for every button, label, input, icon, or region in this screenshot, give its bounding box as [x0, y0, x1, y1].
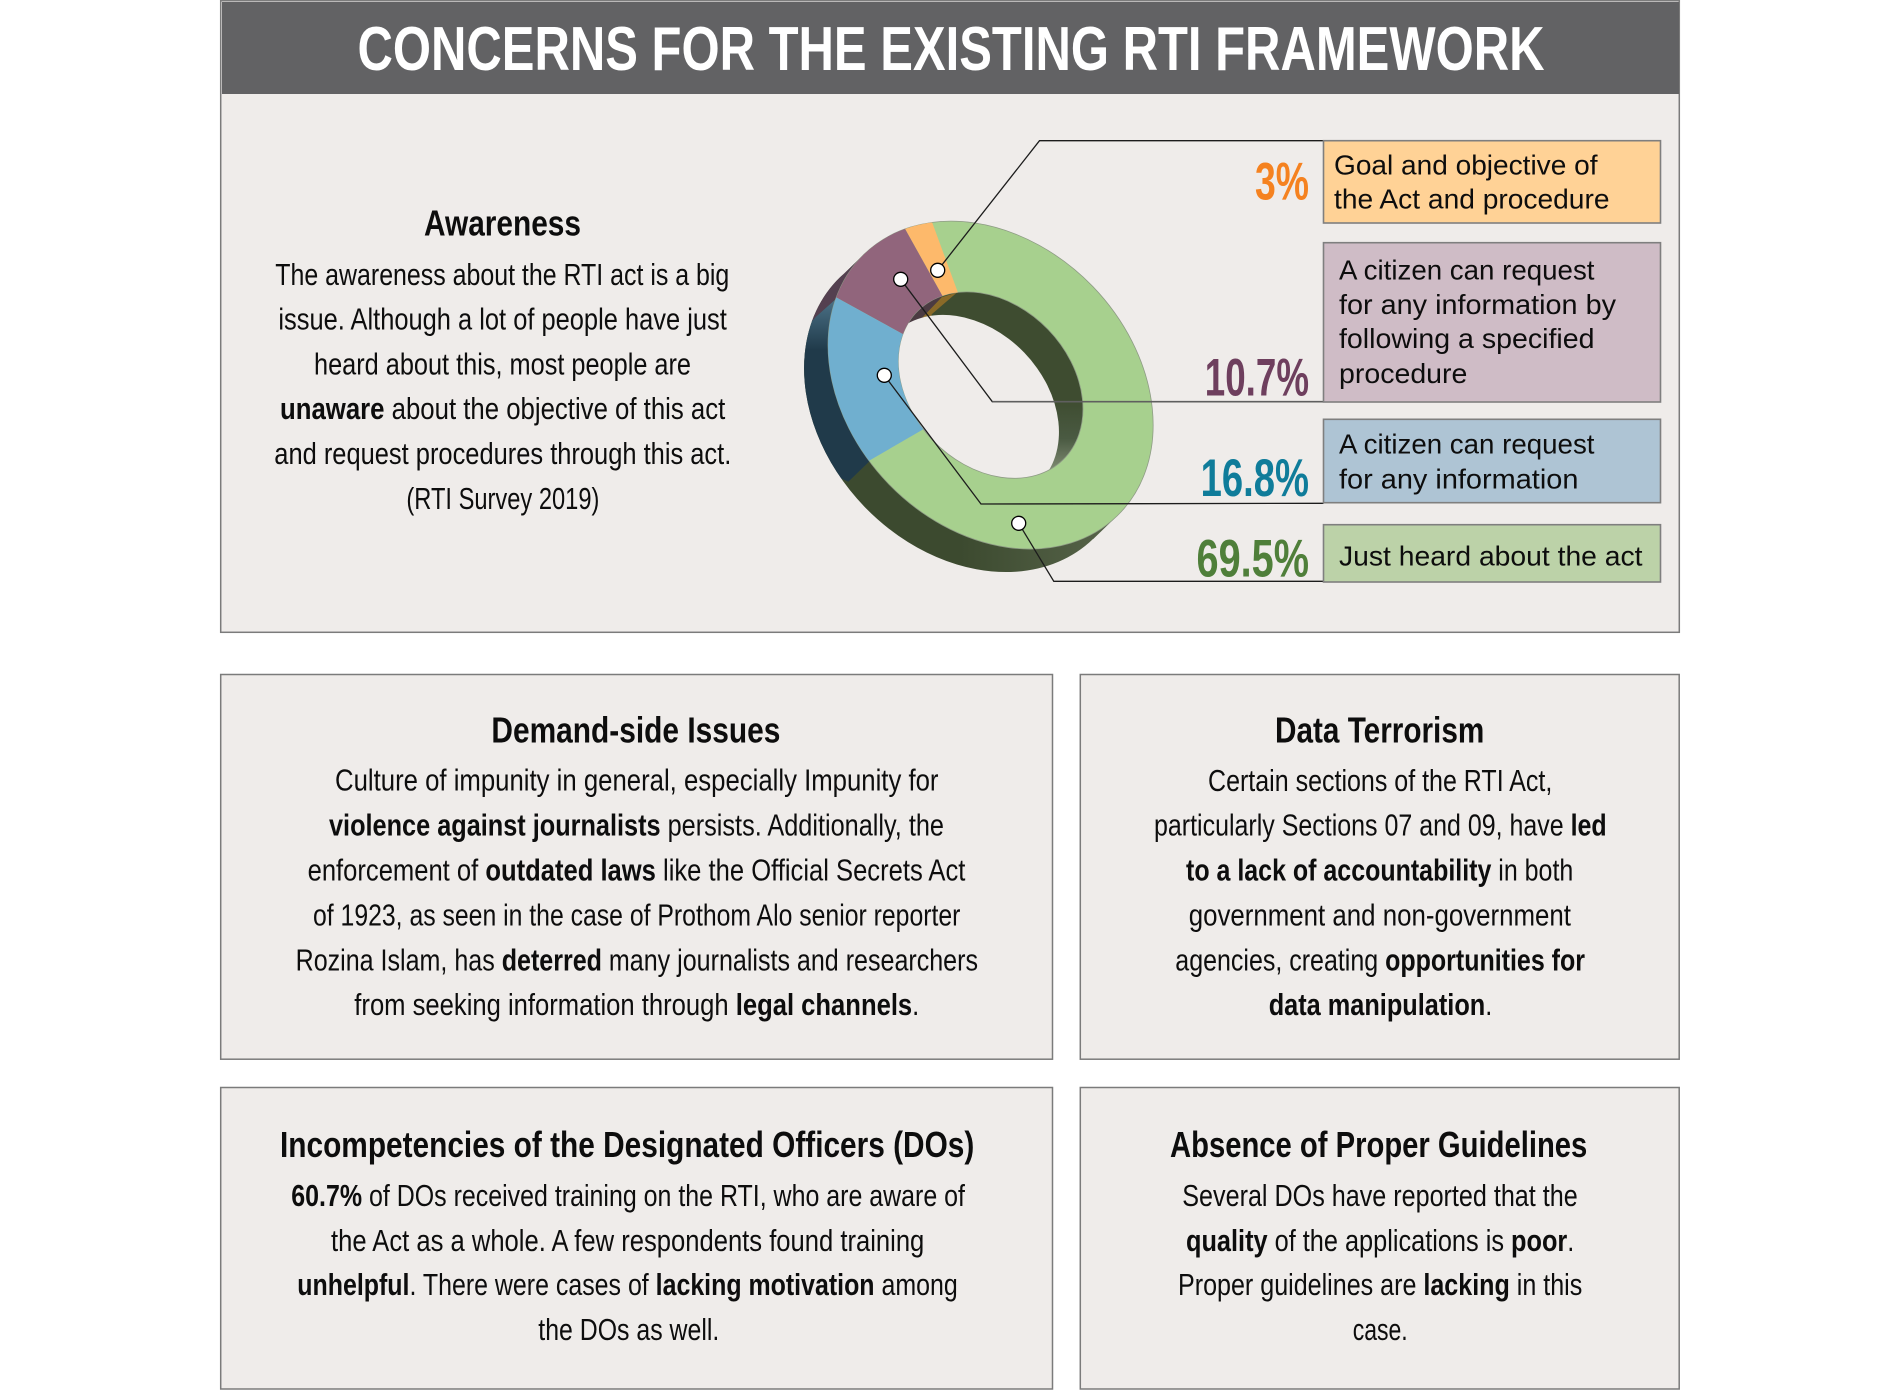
legend: just heard: [1324, 525, 1660, 582]
legend: specified procedure: [1324, 243, 1660, 402]
text block: data terrorism: government and non-government: [1189, 898, 1571, 933]
leader: 3%: [931, 141, 1324, 277]
text block: data terrorism: [1154, 763, 1607, 1022]
legend: any information: for any information: [1339, 464, 1578, 495]
text block: incompetencies: the DOs as well.: [538, 1312, 719, 1347]
donut top face: coloured segments: [828, 222, 958, 461]
title: CONCERNS FOR THE EXISTING RTI FRAMEWORK: [358, 15, 1545, 84]
legend: specified procedure: following a specified: [1339, 323, 1594, 354]
legend: any information: A citizen can request: [1339, 429, 1595, 460]
value: 69.5%: 69.5%: [1196, 530, 1309, 589]
text block: demand-side issues: from seeking information through legal channels.: [354, 987, 919, 1022]
leader: 16.8%: [877, 368, 1324, 504]
title banner: [222, 2, 1679, 94]
value: 3%: 3%: [1255, 152, 1309, 211]
legend: goal and objective: [1324, 141, 1660, 223]
heading: data terrorism: Data Terrorism: [1275, 710, 1484, 751]
text block: demand-side issues: enforcement of outdated laws like the Official Secrets Act: [308, 853, 966, 888]
legend: specified procedure: A citizen can request: [1339, 254, 1595, 285]
legend: goal and objective: the Act and procedure: [1334, 184, 1610, 214]
text block: awareness: issue. Although a lot of people have just: [278, 302, 727, 337]
leader: 10.7%: [894, 272, 1324, 402]
text block: absence of proper guidelines: quality of the applications is poor.: [1186, 1223, 1574, 1258]
legend: just heard: Just heard about the act: [1339, 540, 1643, 571]
text block: incompetencies: the Act as a whole. A few respondents found training: [331, 1223, 924, 1258]
donut outer wall: [804, 222, 1113, 572]
text block: absence of proper guidelines: Proper guidelines are lacking in this: [1178, 1267, 1582, 1302]
value: 16.8%: 16.8%: [1201, 449, 1309, 508]
text block: incompetencies: [291, 1178, 965, 1347]
text block: demand-side issues: of 1923, as seen in the case of Prothom Alo senior reporter: [313, 898, 960, 933]
text block: absence of proper guidelines: case.: [1353, 1312, 1408, 1347]
text block: awareness: and request procedures through this act.: [274, 436, 731, 471]
text block: data terrorism: data manipulation.: [1269, 987, 1492, 1022]
donut top face: green segment 69.5%: [762, 156, 1219, 615]
text block: incompetencies: 60.7% of DOs received training on the RTI, who are aware of: [291, 1178, 965, 1213]
text block: demand-side issues: violence against journalists persists. Additionally, the: [329, 808, 944, 843]
panel: incompetencies of the designated officers: [221, 1088, 1052, 1389]
chart: 3D donut: [804, 220, 1154, 572]
panel: data terrorism: [1080, 674, 1679, 1059]
panel: demand-side issues: [221, 674, 1052, 1059]
panel: absence of proper guidelines: [1080, 1088, 1679, 1389]
panel: awareness: [221, 1, 1679, 632]
text block: awareness: (RTI Survey 2019): [406, 481, 599, 516]
text block: demand-side issues: Rozina Islam, has deterred many journalists and researchers: [296, 943, 978, 978]
legend: specified procedure: for any information by: [1339, 289, 1616, 320]
value: 10.7%: 10.7%: [1205, 348, 1309, 407]
text block: data terrorism: particularly Sections 07 and 09, have led: [1154, 808, 1607, 843]
legend: specified procedure: procedure: [1339, 358, 1467, 389]
heading: demand-side issues: Demand-side Issues: [491, 710, 780, 750]
text block: demand-side issues: [296, 763, 978, 1022]
text block: awareness: unaware about the objective of this act: [280, 391, 726, 426]
text block: absence of proper guidelines: [1178, 1178, 1582, 1347]
donut inner wall and hole: [898, 293, 1082, 478]
text block: data terrorism: Certain sections of the RTI Act,: [1208, 763, 1552, 798]
text block: absence of proper guidelines: Several DOs have reported that the: [1182, 1178, 1578, 1213]
leader: 69.5%: [1012, 516, 1324, 581]
heading: absence of proper guidelines: Absence of Proper Guidelines: [1170, 1124, 1587, 1165]
heading: awareness: Awareness: [424, 203, 581, 244]
text block: awareness: heard about this, most people are: [314, 347, 691, 382]
text block: awareness: [274, 257, 731, 516]
legend: goal and objective: Goal and objective of: [1334, 149, 1598, 180]
legend: any information: [1324, 419, 1660, 503]
text block: incompetencies: unhelpful. There were cases of lacking motivation among: [297, 1267, 958, 1302]
text block: data terrorism: agencies, creating opportunities for: [1175, 943, 1585, 978]
heading: incompetencies: Incompetencies of the Designated Officers (DOs): [280, 1124, 974, 1165]
text block: demand-side issues: Culture of impunity in general, especially Impunity for: [335, 763, 938, 798]
text block: awareness: The awareness about the RTI act is a big: [275, 257, 729, 292]
text block: data terrorism: to a lack of accountability in both: [1186, 853, 1573, 888]
